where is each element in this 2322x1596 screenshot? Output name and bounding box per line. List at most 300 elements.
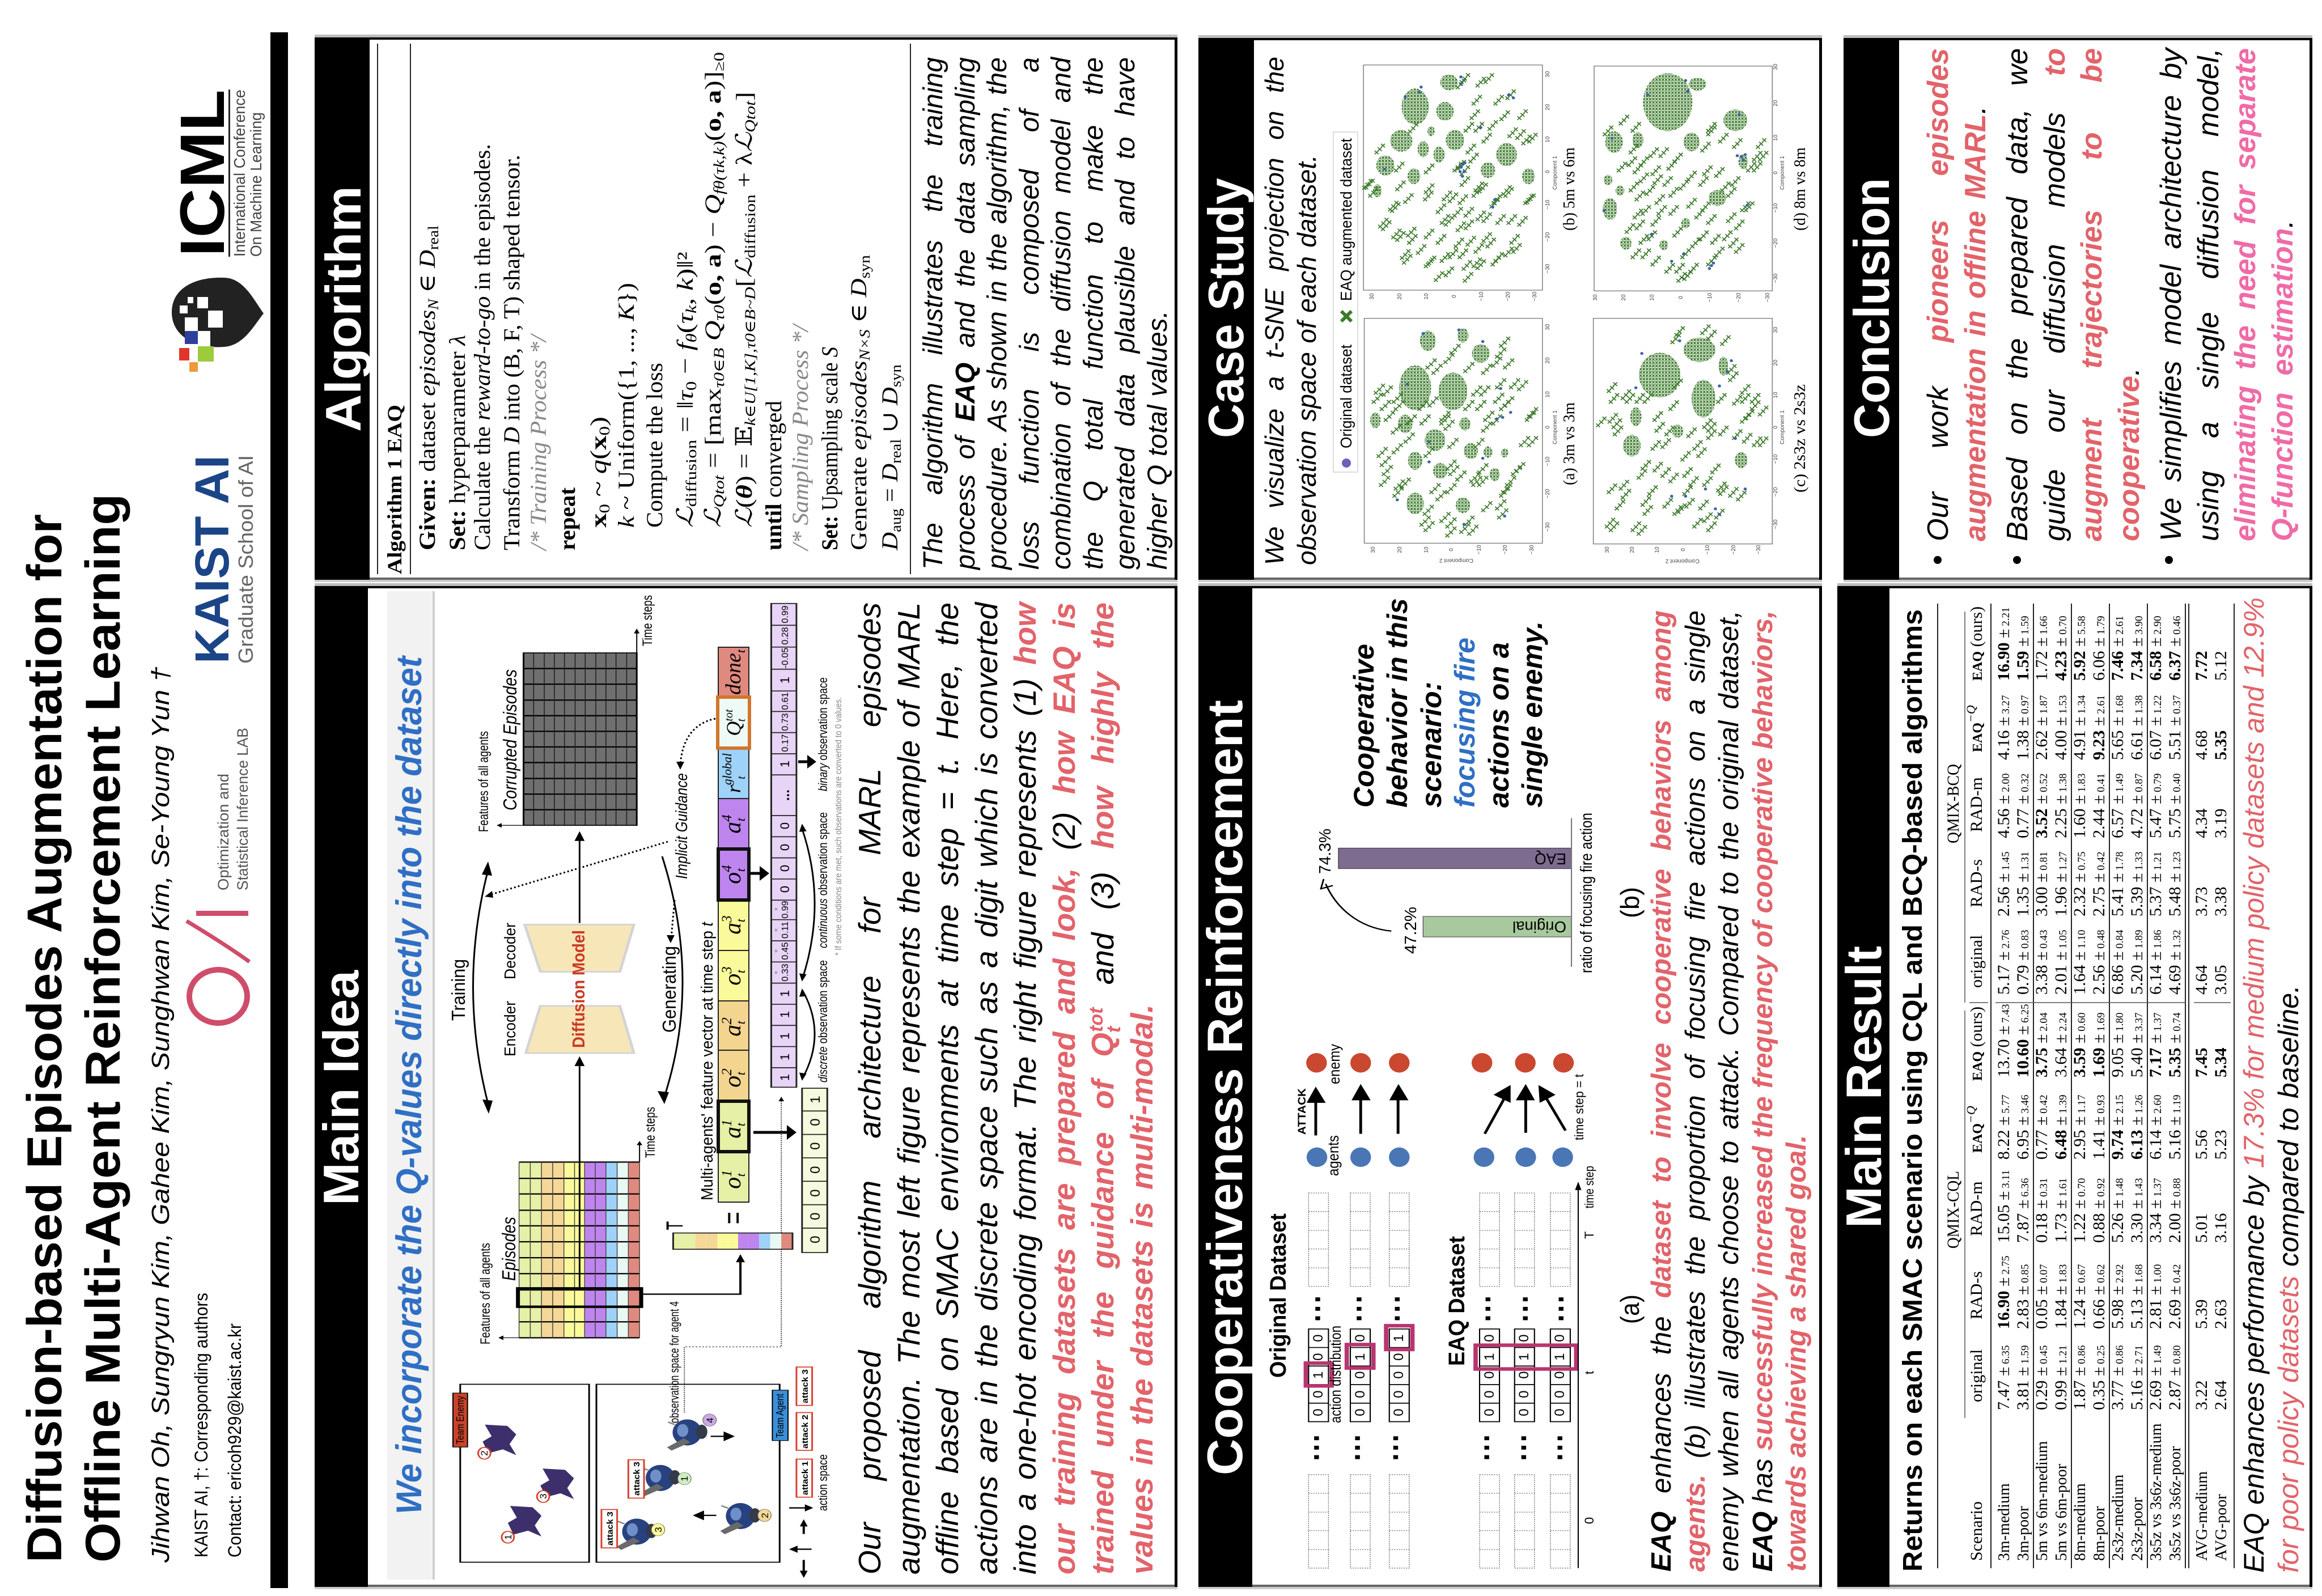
results table: 0.77 ± 0.42 xyxy=(2032,1095,2051,1160)
cooperativeness header band: Cooperativeness Reinforcement xyxy=(1197,700,1253,1475)
results table: 5.12 xyxy=(2211,651,2230,681)
main idea body text: offline based on SMAC environments at time step = t. Here, the xyxy=(930,602,965,1574)
pseudocode: ( xyxy=(700,296,726,305)
results table: 3.38 ± 0.43 xyxy=(2032,930,2051,995)
chart: t-SNE 5m vs 6m: 20 xyxy=(1397,293,1403,300)
diagram: SMAC scene: Team Enemy xyxy=(455,1396,466,1444)
diagram: action distribution grids: 0 xyxy=(1311,1353,1326,1361)
diagram: multi-agent feature vector: 3 xyxy=(719,915,735,923)
results table: 5.40 ± 3.37 xyxy=(2128,1013,2146,1077)
title: Offline Multi-Agent Reinforcement Learning xyxy=(76,494,130,1563)
chart: t-SNE 5m vs 6m: Component 1 xyxy=(1552,156,1558,190)
diagram: action distribution grids: 1 xyxy=(1482,1353,1497,1361)
chart: t-SNE 8m vs 8m: 0 xyxy=(1678,296,1684,299)
diagram: observation value cells: 0.11 xyxy=(781,922,790,939)
diagram: action distribution grids: 0 xyxy=(1552,1371,1567,1379)
diagram: multi-agent feature vector: o xyxy=(720,1177,746,1189)
results table: 13.70 ± 7.43 xyxy=(1994,1004,2013,1077)
chart: ratio of focusing fire action: Original xyxy=(1512,918,1566,936)
poster header xyxy=(18,32,288,1588)
affiliation and contact: Contact: ericoh929@kaist.ac.kr xyxy=(224,1323,245,1557)
pseudocode: k ~ Uniform({1, ..., K}) xyxy=(613,283,639,528)
diagram: action distribution grids: 0 xyxy=(1482,1408,1497,1416)
chart: t-SNE 3m vs 3m: 30 xyxy=(1370,546,1376,553)
diagram: observation value cells: 0.28 xyxy=(781,627,790,645)
panel: conclusion xyxy=(1844,38,2312,580)
results table: 5.20 ± 1.89 xyxy=(2128,930,2146,995)
results table: 5.48 ± 1.23 xyxy=(2166,852,2184,916)
pseudocode: Generate episodes xyxy=(846,372,871,550)
chart: t-SNE 2s3z vs 2s3z: Component 2 xyxy=(1666,558,1700,564)
chart: ratio of focusing fire action: 47.2% xyxy=(1402,907,1420,954)
chart: t-SNE 2s3z vs 2s3z: −10 xyxy=(1705,545,1711,554)
diagram: corrupted episodes grid: Features of all agents xyxy=(476,731,491,832)
pseudocode: /* Training Process */ xyxy=(526,333,551,551)
pseudocode: Transform D into (B, F, T) shaped tensor. xyxy=(499,155,524,550)
chart: t-SNE 8m vs 8m: −20 xyxy=(1736,292,1742,302)
pseudocode: repeat xyxy=(554,487,580,550)
conclusion text: guide our diffusion models to xyxy=(2039,48,2071,541)
results table: 4.72 ± 0.87 xyxy=(2128,774,2146,838)
results table: −Q xyxy=(1964,705,1978,723)
cooperativeness body text: towards achieving a shared goal. xyxy=(1781,1135,1812,1572)
diagram: action distribution grids: 0 xyxy=(1516,1390,1532,1398)
diagram: multi-agent feature vector: 4 xyxy=(719,814,735,822)
diagram: multi-agent feature vector: tot xyxy=(723,709,735,721)
results table: 8m-medium xyxy=(2071,1483,2089,1561)
results table: 0.99 ± 1.21 xyxy=(2052,1345,2070,1410)
results table: 5.92 ± 5.58 xyxy=(2070,616,2089,681)
icon: ICML brain xyxy=(172,278,264,372)
chart: t-SNE 5m vs 6m: 30 xyxy=(1545,71,1551,78)
pseudocode: Set: hyperparameter λ xyxy=(444,335,470,550)
results table: 2.83 ± 0.85 xyxy=(2014,1264,2032,1329)
results table: 6.37 ± 0.46 xyxy=(2166,616,2184,681)
chart: ratio of focusing fire action xyxy=(1316,813,1645,973)
results table: 1.84 ± 1.83 xyxy=(2052,1264,2070,1329)
ICML logo: International Conference xyxy=(231,90,248,257)
main idea body text xyxy=(852,601,1159,1574)
chart: t-SNE 3m vs 3m: 30 xyxy=(1545,324,1551,330)
chart: t-SNE 5m vs 6m xyxy=(1363,65,1558,301)
diagram: multi-agent feature vector: a xyxy=(720,1025,746,1037)
chart: t-SNE 2s3z vs 2s3z: Component 1 xyxy=(1779,410,1786,444)
pseudocode: Given: dataset episodes xyxy=(414,318,440,550)
results table: 5.98 ± 2.92 xyxy=(2108,1264,2127,1329)
results table: 2.25 ± 1.38 xyxy=(2052,774,2070,838)
results table: 2.69 ± 1.49 xyxy=(2146,1345,2165,1410)
results table: 2.87 ± 0.80 xyxy=(2166,1345,2184,1410)
diagram: action distribution grids xyxy=(1266,1166,1645,1568)
chart: t-SNE 3m vs 3m: 0 xyxy=(1545,426,1551,429)
diagram: multi-agent feature vector: a xyxy=(720,1127,746,1139)
cooperativeness body text: EAQ has successfully increased the frequency of cooperative behaviors, xyxy=(1747,610,1778,1572)
pseudocode: until converged xyxy=(761,401,786,550)
chart: t-SNE 2s3z vs 2s3z: −30 xyxy=(1756,545,1762,554)
results table: 6.57 ± 1.49 xyxy=(2108,774,2127,838)
diagram: multi-agent feature vector xyxy=(698,647,816,1202)
diagram: episodes grid: Episodes xyxy=(498,1217,519,1281)
results table: RAD-s xyxy=(1967,1271,1986,1319)
results table: 5.16 ± 1.19 xyxy=(2166,1095,2184,1160)
diagram: observation value cells: 1 xyxy=(808,1096,823,1103)
cooperativeness body text xyxy=(1646,610,1812,1572)
chart: t-SNE 3m vs 3m: −30 xyxy=(1529,545,1535,554)
authors: Jihwan Oh, Sungryun Kim, Gahee Kim, Sunghwan Kim, Se-Young Yun † xyxy=(147,667,175,1563)
chart: t-SNE 5m vs 6m: 0 xyxy=(1451,295,1457,298)
diagram: observation value cells: 1 xyxy=(778,990,792,997)
pseudocode: τ xyxy=(672,389,698,401)
pseudocode: ≥0 xyxy=(711,52,727,71)
results table: EAQ (ours) xyxy=(1967,1007,1986,1081)
diagram: observation value cells: 0 xyxy=(808,1189,823,1197)
conclusion text: Our work pioneers episodes xyxy=(1922,48,1955,541)
conclusion header band: Conclusion xyxy=(1844,178,1900,438)
pseudocode: N×S xyxy=(857,329,873,361)
algorithm description text: procedure. As shown in the algorithm, the xyxy=(982,57,1012,570)
pseudocode: D xyxy=(877,532,902,551)
chart: t-SNE 2s3z vs 2s3z: 20 xyxy=(1773,359,1779,366)
diagram: action distribution grids: 0 xyxy=(1353,1408,1368,1416)
diagram: multi-agent feature vector: t xyxy=(734,868,748,872)
chart captions xyxy=(1560,147,1809,493)
OSI lab name xyxy=(215,728,251,890)
pseudocode xyxy=(378,44,910,574)
conclusion text: Based on the prepared data, we xyxy=(2001,48,2034,541)
results table: 3.16 xyxy=(2211,1213,2230,1243)
diagram: SMAC scene: attack 3 xyxy=(632,1462,642,1496)
results table: 0.05 ± 0.07 xyxy=(2032,1264,2051,1329)
pseudocode: N xyxy=(425,298,442,311)
results table: 6.86 ± 0.84 xyxy=(2108,929,2127,995)
diagram: agents attacking enemies: time step = t xyxy=(1572,1074,1586,1140)
results table: 3s5z vs 3s6z-poor xyxy=(2167,1446,2184,1561)
callout: cooperative behavior text: Cooperative xyxy=(1348,644,1380,808)
pseudocode: Set: Upsampling scale S xyxy=(817,347,842,550)
diagram: multi-agent feature vector: a xyxy=(720,822,746,834)
pseudocode: ℒ(θ) = 𝔼 xyxy=(731,436,757,528)
results table: 6.07 ± 1.22 xyxy=(2146,695,2165,760)
diagram: multi-agent feature vector: t xyxy=(734,1173,748,1177)
diagram: observation value cells: 1 xyxy=(778,761,792,767)
chart: t-SNE 8m vs 8m: −30 xyxy=(1765,292,1771,302)
diagram: multi-agent feature vector: t xyxy=(734,817,748,821)
pseudocode: , xyxy=(672,291,698,305)
case study intro text: We visualize a t-SNE projection on the xyxy=(1260,57,1289,565)
main idea body text: values in the datasets is multi-modal. xyxy=(1124,1004,1159,1574)
results table: 8m-poor xyxy=(2091,1506,2108,1561)
diagram: SMAC scene: 2 xyxy=(760,1513,770,1518)
chart: t-SNE 3m vs 3m: 10 xyxy=(1423,546,1430,553)
chart: t-SNE 5m vs 6m: 0 xyxy=(1545,170,1551,173)
results table: 2s3z-medium xyxy=(2109,1474,2127,1561)
chart: t-SNE 8m vs 8m: 20 xyxy=(1621,294,1627,301)
diagram: agents attacking enemies: agents xyxy=(1325,1135,1342,1176)
pseudocode: ∈ xyxy=(414,268,440,299)
main idea subheading: We incorporate the Q-values directly into the dataset xyxy=(389,655,429,1514)
arrows: training and generating: Training xyxy=(448,959,469,1021)
results table: AVG-medium xyxy=(2193,1471,2211,1561)
ICML logo xyxy=(168,90,265,257)
KAIST AI logo: KAIST AI xyxy=(185,455,239,664)
diagram: observation value cells: 0.99 xyxy=(781,901,790,919)
results table: 8.22 ± 5.77 xyxy=(1994,1095,2013,1160)
results table xyxy=(1938,604,2234,1568)
chart captions: (c) 2s3z vs 2s3z xyxy=(1791,384,1809,493)
results table: 5.35 ± 0.74 xyxy=(2166,1012,2184,1077)
pseudocode: τ xyxy=(672,312,698,324)
results table: 2.63 xyxy=(2211,1299,2230,1329)
diagram: action distribution grids: 1 xyxy=(1353,1353,1368,1361)
results table: 0.29 ± 0.45 xyxy=(2032,1345,2051,1410)
arrows: training and generating: Generating xyxy=(659,946,680,1033)
results table: 5.37 ± 1.21 xyxy=(2146,852,2165,916)
results table: EAQ xyxy=(1971,1123,1985,1153)
results table: 1.72 ± 1.66 xyxy=(2032,616,2051,681)
results table: 6.14 ± 1.86 xyxy=(2146,930,2165,995)
pseudocode: k∈U[1,K],τ0∈B~D xyxy=(742,287,759,426)
diagram: multi-agent feature vector: global xyxy=(720,753,734,785)
conclusion text: We simplifies model architecture by xyxy=(2155,48,2188,541)
diagram: observation value cells: 1 xyxy=(778,1033,792,1039)
algorithm description text: higher Q total values. xyxy=(1143,311,1172,570)
diagram: observation value cells: 0.61 xyxy=(781,692,790,710)
diagram: observation value cells: * xyxy=(773,971,783,974)
results table: original xyxy=(1967,935,1986,988)
conclusion text: eliminating the need for separate xyxy=(2229,48,2262,541)
results table: 5.01 xyxy=(2192,1213,2211,1243)
diagram: SMAC scene: 3 xyxy=(653,1527,664,1533)
diagram: action distribution grids: 1 xyxy=(1391,1334,1406,1342)
diagram: action distribution grids: 0 xyxy=(1391,1390,1406,1398)
results table: QMIX-CQL xyxy=(1944,1171,1963,1249)
diagram: observation value cells: 0 xyxy=(808,1166,823,1174)
results table: 2.32 ± 0.75 xyxy=(2070,852,2089,916)
panel: main result xyxy=(1837,586,2312,1587)
chart: t-SNE 2s3z vs 2s3z: −20 xyxy=(1773,487,1779,496)
results table: 1.69 ± 1.69 xyxy=(2090,1013,2108,1077)
diagram: observation value cells: ... xyxy=(777,789,793,801)
chart captions: (b) 5m vs 6m xyxy=(1560,147,1578,231)
diagram: SMAC scene: attack 1 xyxy=(800,1461,810,1495)
callout: cooperative behavior text: single enemy. xyxy=(1516,621,1548,808)
pseudocode: Qtot xyxy=(742,100,759,133)
pseudocode: diffusion xyxy=(742,194,759,258)
diagram: SMAC scene: action space xyxy=(816,1454,830,1511)
results table: 0.18 ± 0.31 xyxy=(2032,1178,2051,1243)
diagram: observation value cells: 0 xyxy=(808,1142,823,1150)
main idea body text: into a one-hot encoding format. The right figure represents (1) how xyxy=(1007,602,1043,1574)
diagram: observation value cells: 1 xyxy=(778,1054,792,1060)
chart: t-SNE 5m vs 6m: 30 xyxy=(1369,293,1375,300)
diagram: multi-agent feature vector: 3 xyxy=(719,966,735,974)
diagram: episodes grid: Features of all agents xyxy=(478,1243,493,1344)
main idea body text: augmentation. The most left figure represents the example of MARL xyxy=(891,602,926,1574)
main idea body text: trained under the guidance of Qttot and (3) how highly the xyxy=(1085,602,1125,1574)
results table: 4.91 ± 1.34 xyxy=(2070,695,2089,760)
results table: 1.22 ± 0.70 xyxy=(2070,1178,2089,1243)
diagram: action distribution grids: 1 xyxy=(1516,1353,1532,1361)
panel: cooperativeness reinforcement xyxy=(1198,586,1822,1587)
results table: 2.56 ± 0.48 xyxy=(2090,930,2108,995)
affiliation and contact xyxy=(191,1293,245,1557)
results table: 10.60 ± 6.25 xyxy=(2014,1004,2032,1077)
pseudocode: ℒ xyxy=(672,506,698,528)
cooperativeness body text: agents. (b) illustrates the proportion of focusing fire actions on a single xyxy=(1680,610,1711,1572)
diagram: action distribution grids: 0 xyxy=(1311,1408,1326,1416)
pseudocode: real xyxy=(888,439,904,464)
diagram: observation value cells: 0.33 xyxy=(781,963,790,982)
results table: 9.05 ± 1.80 xyxy=(2108,1013,2127,1077)
results table: 0.88 ± 0.92 xyxy=(2090,1178,2108,1243)
chart: t-SNE 2s3z vs 2s3z xyxy=(1594,319,1786,564)
conclusion text: using a single diffusion model, xyxy=(2192,48,2224,541)
pseudocode: ℒ xyxy=(731,131,757,152)
diagram: corrupted episodes grid: Time steps xyxy=(640,595,655,646)
chart: t-SNE 5m vs 6m: −10 xyxy=(1545,200,1551,209)
main result summary text xyxy=(2238,597,2304,1573)
pseudocode: ∈ xyxy=(846,298,871,329)
diagram: observation value cells: 0 xyxy=(778,865,792,872)
diagram: SMAC scene: 4 xyxy=(705,1417,715,1423)
diagram: action distribution grids: T xyxy=(1582,1232,1596,1239)
diagram: action distribution grids: 0 xyxy=(1482,1371,1497,1379)
diagram: multi-agent feature vector: a xyxy=(720,923,746,935)
results table: 1.24 ± 0.67 xyxy=(2070,1264,2089,1329)
chart: t-SNE 2s3z vs 2s3z: 30 xyxy=(1604,546,1611,553)
pseudocode: ℒ xyxy=(731,257,757,278)
results table: 3.73 xyxy=(2192,886,2211,916)
chart: t-SNE 8m vs 8m: −30 xyxy=(1773,273,1779,283)
diagram: observation value cells: 0 xyxy=(808,1236,823,1243)
results table: 2.62 ± 1.87 xyxy=(2032,695,2051,760)
diagram: observation value cells xyxy=(684,604,844,1414)
pseudocode: ( xyxy=(700,132,726,141)
results table: 5.75 ± 0.40 xyxy=(2166,774,2184,838)
pseudocode: ~ xyxy=(586,474,611,504)
chart: t-SNE 3m vs 3m: −30 xyxy=(1545,522,1551,532)
diagram: SMAC scene xyxy=(453,1301,830,1578)
results table: AVG-poor xyxy=(2213,1494,2230,1561)
chart: t-SNE 5m vs 6m: −20 xyxy=(1545,232,1551,241)
results table: 7.17 ± 1.37 xyxy=(2146,1013,2165,1077)
affiliation and contact: KAIST AI, †: Corresponding authors xyxy=(191,1293,211,1557)
results table: 3m-medium xyxy=(1995,1483,2013,1561)
diagram: action distribution grids: EAQ Dataset xyxy=(1444,1236,1469,1366)
pseudocode: Algorithm 1 EAQ xyxy=(383,405,406,574)
callout: cooperative behavior text: focusing fire xyxy=(1449,638,1481,808)
pseudocode: o, a)] xyxy=(700,75,726,132)
pseudocode: /* Sampling Process */ xyxy=(787,322,813,551)
results table: 5.16 ± 2.71 xyxy=(2128,1345,2146,1410)
algorithm description text: the Q total function to make the xyxy=(1078,57,1109,570)
results table: original xyxy=(1967,1349,1986,1402)
pseudocode: [ xyxy=(731,278,757,287)
chart: t-SNE 3m vs 3m xyxy=(1365,319,1558,563)
diagram: action distribution grids: Original Dataset xyxy=(1266,1213,1291,1378)
results table: 1.73 ± 1.61 xyxy=(2052,1178,2070,1243)
vertical black divider bar xyxy=(270,32,288,1588)
algorithm header band xyxy=(315,37,371,580)
results table: QMIX-BCQ xyxy=(1944,764,1963,843)
pseudocode: D xyxy=(877,464,902,482)
results table: 7.72 xyxy=(2192,651,2211,681)
results table: 2.64 xyxy=(2211,1381,2230,1410)
results table: 4.56 ± 2.00 xyxy=(1994,774,2013,838)
algorithm description text: The algorithm illustrates the training xyxy=(918,57,948,570)
diagram: SMAC scene: Team Agent xyxy=(774,1394,786,1438)
chart: t-SNE 5m vs 6m: −20 xyxy=(1505,291,1511,301)
main result header band xyxy=(1836,586,1892,1587)
legend xyxy=(1333,132,1358,472)
algorithm description text: process of EAQ and the data sampling xyxy=(950,57,981,570)
pseudocode: ∪ xyxy=(877,405,902,439)
diagram: observation value cells: continuous observation space xyxy=(816,812,830,948)
results table: 2s3z-poor xyxy=(2129,1497,2146,1561)
diagram: multi-agent feature vector: o xyxy=(720,1076,746,1088)
chart: t-SNE 2s3z vs 2s3z: 0 xyxy=(1773,426,1779,429)
diagram: observation value cells: 0 xyxy=(808,1212,823,1220)
diagram: corrupted episodes grid: Corrupted Episodes xyxy=(499,669,520,810)
results table: 3.05 xyxy=(2211,965,2230,995)
diagram: observation value cells: 1 xyxy=(778,1011,792,1018)
chart: t-SNE 2s3z vs 2s3z: −10 xyxy=(1773,454,1779,464)
results table: 1.60 ± 1.83 xyxy=(2070,774,2089,838)
chart: t-SNE 3m vs 3m: −20 xyxy=(1502,545,1509,554)
pseudocode: ) xyxy=(586,417,611,426)
pseudocode: Qtot xyxy=(711,474,727,507)
diagram: action distribution grids: 0 xyxy=(1482,1334,1497,1342)
algorithm header band: Algorithm xyxy=(315,186,371,432)
chart: t-SNE 8m vs 8m: Component 1 xyxy=(1779,156,1786,190)
main idea body text: Our proposed algorithm architecture for MARL episodes xyxy=(852,602,887,1574)
results table: 4.64 xyxy=(2192,965,2211,995)
results table: 4.16 ± 3.27 xyxy=(1994,695,2013,760)
legend: EAQ augmented dataset xyxy=(1337,138,1355,301)
chart: t-SNE 3m vs 3m: 0 xyxy=(1448,548,1455,551)
chart: t-SNE 5m vs 6m: −30 xyxy=(1545,264,1551,273)
results table: 7.87 ± 6.36 xyxy=(2014,1178,2032,1243)
diagram: action distribution grids: 0 xyxy=(1311,1390,1326,1398)
chart: t-SNE 2s3z vs 2s3z: 10 xyxy=(1773,392,1779,398)
conclusion text: augment trajectories to be xyxy=(2075,48,2108,541)
diagram: multi-agent feature vector: t xyxy=(734,649,748,653)
diagram: multi-agent feature vector: t xyxy=(734,1071,748,1075)
chart: t-SNE 3m vs 3m: 20 xyxy=(1397,546,1403,553)
chart: ratio of focusing fire action: (b) xyxy=(1615,887,1645,918)
results table: 9.23 ± 2.61 xyxy=(2090,695,2108,760)
diagram: action distribution grids: (a) xyxy=(1615,1294,1645,1324)
diagram: action distribution grids: 0 xyxy=(1516,1371,1532,1379)
diagram: observation value cells: 0 xyxy=(808,1118,823,1126)
diagram: multi-agent feature vector: o xyxy=(720,974,746,986)
arrows: training and generating xyxy=(448,719,715,1114)
pseudocode: 0 xyxy=(683,381,700,390)
diagram: multi-agent feature vector: o xyxy=(720,872,746,884)
callout: cooperative behavior text: scenario: xyxy=(1416,682,1447,808)
results table: 7.34 ± 3.90 xyxy=(2128,616,2146,681)
diagram: diffusion model: Encoder xyxy=(501,1001,519,1056)
diagram: SMAC scene: 1 xyxy=(503,1534,514,1540)
callout: cooperative behavior text xyxy=(1348,598,1548,808)
results table: 1.87 ± 0.86 xyxy=(2070,1345,2089,1410)
results table: 6.13 ± 1.26 xyxy=(2128,1095,2146,1160)
results table: 3.77 ± 0.86 xyxy=(2108,1345,2127,1410)
results table: 6.06 ± 1.79 xyxy=(2090,616,2108,681)
table heading: Returns on each SMAC scenario using CQL and BCQ-based algorithms xyxy=(1898,609,1928,1572)
chart: t-SNE 5m vs 6m: 10 xyxy=(1545,136,1551,143)
results table: 1.35 ± 1.31 xyxy=(2014,852,2032,916)
